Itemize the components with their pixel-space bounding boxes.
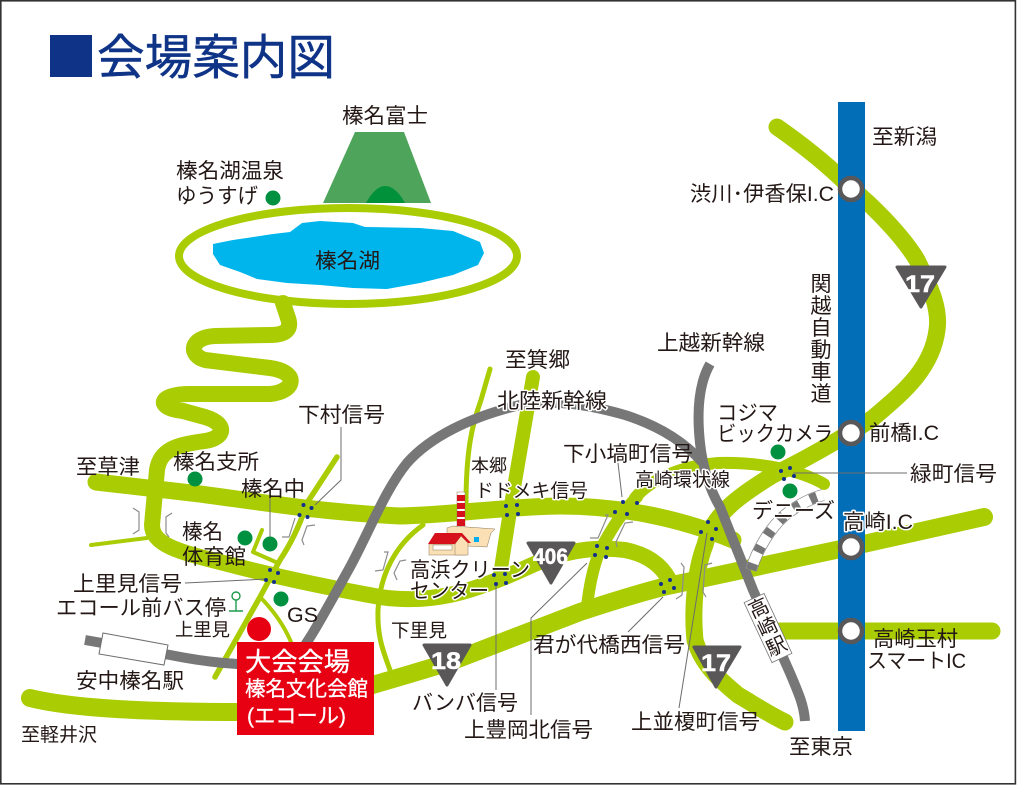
label: Takasaki ring road: 高崎環状線 <box>635 469 730 491</box>
road: lake ring <box>179 208 517 304</box>
road: western stub <box>91 538 147 545</box>
label: Haruna Fuji: 榛名富士 <box>342 105 428 128</box>
label: Kan-etsu expressway: 自 <box>810 317 832 340</box>
shield: route 17 south <box>694 647 740 687</box>
interchange: Takasaki Tamamura <box>840 620 862 642</box>
label: Shimomura signal: 下村信号 <box>298 404 385 427</box>
label: to Karuizawa: 至軽井沢 <box>21 724 97 746</box>
road: National Route 18 to Takasaki I.C <box>30 517 984 712</box>
label: Shibukawa Ikaho I.C: 渋川･伊香保I.C <box>690 183 834 206</box>
venue label box <box>237 642 374 735</box>
interchange: Maebashi <box>840 422 862 444</box>
label: Kan-etsu expressway: 車 <box>810 361 832 384</box>
road: gymnasium branch <box>253 530 278 563</box>
label: Haruna onsen <box>176 160 284 208</box>
label: to Kusatsu: 至草津 <box>76 456 140 479</box>
label: Haruna branch office: 榛名支所 <box>173 451 259 474</box>
station label: Takasaki: 駅 <box>763 633 791 661</box>
road: Kusatsu east-west route <box>96 482 733 540</box>
label: Haruna gymnasium <box>182 521 246 569</box>
label: Kan-etsu expressway <box>810 273 832 406</box>
label: Lake Haruna: 榛名湖 <box>315 250 380 273</box>
label: Hokuriku Shinkansen: 北陸新幹線 <box>497 390 607 413</box>
rail: Joetsu Shinkansen <box>699 364 805 721</box>
label: Kojima Bic Camera: コジマ <box>717 402 778 425</box>
venue label box: 大会会場 <box>245 647 350 677</box>
label: Haruna onsen: 榛名湖温泉 <box>176 160 284 183</box>
label: Denny's: デニーズ <box>752 500 835 523</box>
station label: Takasaki: 崎 <box>754 613 782 642</box>
label: Annaka-Haruna station: 安中榛名駅 <box>76 670 184 693</box>
label: Haruna gymnasium: 榛名 <box>182 521 223 544</box>
road: thin Hongo road <box>466 369 490 505</box>
shield: route 17 north: 17 <box>905 271 935 298</box>
label: Joetsu Shinkansen: 上越新幹線 <box>657 332 765 355</box>
label: Kamisatomi: 上里見 <box>175 620 230 640</box>
label: Kaminamie signal: 上並榎町信号 <box>631 711 760 734</box>
venue marker <box>247 617 271 641</box>
label: gas station: GS <box>287 604 318 627</box>
label: Hongo: 本郷 <box>471 456 507 476</box>
road: Takasaki I.C east stub to Tamamura <box>780 622 992 640</box>
shield: route 406: 406 <box>533 544 568 569</box>
label: Takahama clean center <box>410 559 530 603</box>
label: Shimosatomi: 下里見 <box>391 620 447 641</box>
shield: route 17 north <box>897 267 945 307</box>
shield: route 18 <box>424 645 470 685</box>
shield: route 18: 18 <box>431 648 461 675</box>
leader lines <box>185 427 907 715</box>
station label: Takasaki: 高 <box>745 594 773 623</box>
venue label box: 榛名文化会館 <box>245 678 368 701</box>
label: to Tokyo: 至東京 <box>789 736 853 759</box>
shield: route 406 <box>528 543 574 583</box>
road: Takasaki ring road <box>635 463 824 498</box>
venue label box: (エコール) <box>247 705 346 728</box>
lake: Haruna <box>213 221 484 289</box>
label: Ecole-mae bus stop: エコール前バス停 <box>56 597 226 620</box>
label: to Minowa: 至箕郷 <box>505 349 570 372</box>
label: Takahama clean center: センター <box>410 580 489 603</box>
rail: Hokuriku Shinkansen <box>85 403 702 665</box>
label: Midoricho signal: 緑町信号 <box>910 463 997 486</box>
label: Haruna gymnasium: 体育館 <box>182 546 246 569</box>
station label: Takasaki <box>744 593 792 663</box>
icon: bus stop <box>229 592 243 611</box>
road: Minowa north-south <box>500 377 533 575</box>
road: Shimomura narrow road <box>215 457 337 677</box>
label: Takasaki I.C: 高崎I.C <box>843 511 913 534</box>
station: Annaka-Haruna box <box>99 633 168 665</box>
label: Maebashi I.C: 前橋I.C <box>869 422 939 445</box>
label: Shimokobana signal: 下小塙町信号 <box>563 443 693 466</box>
label: Kan-etsu expressway: 関 <box>810 273 832 296</box>
label: Kamisatomi signal: 上里見信号 <box>73 573 182 596</box>
label: Dodomeki signal: ドドメキ信号 <box>475 480 588 502</box>
label: Takahama clean center: 高浜クリーン <box>410 559 530 582</box>
label: Haruna junior high: 榛名中 <box>241 478 305 501</box>
road: ring road south link <box>587 497 637 606</box>
road: GS branch <box>260 597 291 642</box>
road: mountain serpentine and western trunk <box>152 303 672 599</box>
green place markers <box>188 190 798 606</box>
expressway: Kan-etsu <box>838 102 865 731</box>
interchange: Takasaki <box>840 536 862 558</box>
label: Banba signal: バンバ信号 <box>412 692 518 715</box>
road: National Route 17 <box>694 127 938 722</box>
label: Haruna onsen: ゆうすげ <box>176 185 258 208</box>
label: Kojima Bic Camera <box>717 402 833 446</box>
label: Kan-etsu expressway: 動 <box>810 339 832 362</box>
label: Kan-etsu expressway: 越 <box>810 295 832 318</box>
label: Kojima Bic Camera: ビックカメラ <box>717 423 833 446</box>
label: Kimigayobashi west signal: 君が代橋西信号 <box>533 634 685 657</box>
shield: route 17 south: 17 <box>701 650 731 677</box>
road: Shimosato branch <box>378 525 423 673</box>
signal dots <box>264 466 796 594</box>
label: Takasaki Tamamura smart IC <box>867 628 966 673</box>
icon: Takahama clean center factory <box>428 492 495 555</box>
label: to Niigata: 至新潟 <box>872 126 937 149</box>
bridge marks <box>133 508 712 599</box>
title: 会場案内図 <box>97 32 335 85</box>
rail: Takasaki station approach line <box>751 495 823 570</box>
label: Kami-Toyooka north signal: 上豊岡北信号 <box>464 719 593 742</box>
interchange: Shibukawa Ikaho <box>840 178 862 200</box>
label: Takasaki Tamamura smart IC: スマートIC <box>867 650 966 673</box>
mountain: Haruna Fuji <box>323 132 431 203</box>
label: Kan-etsu expressway: 道 <box>810 383 832 406</box>
label: Takasaki Tamamura smart IC: 高崎玉村 <box>873 628 958 651</box>
